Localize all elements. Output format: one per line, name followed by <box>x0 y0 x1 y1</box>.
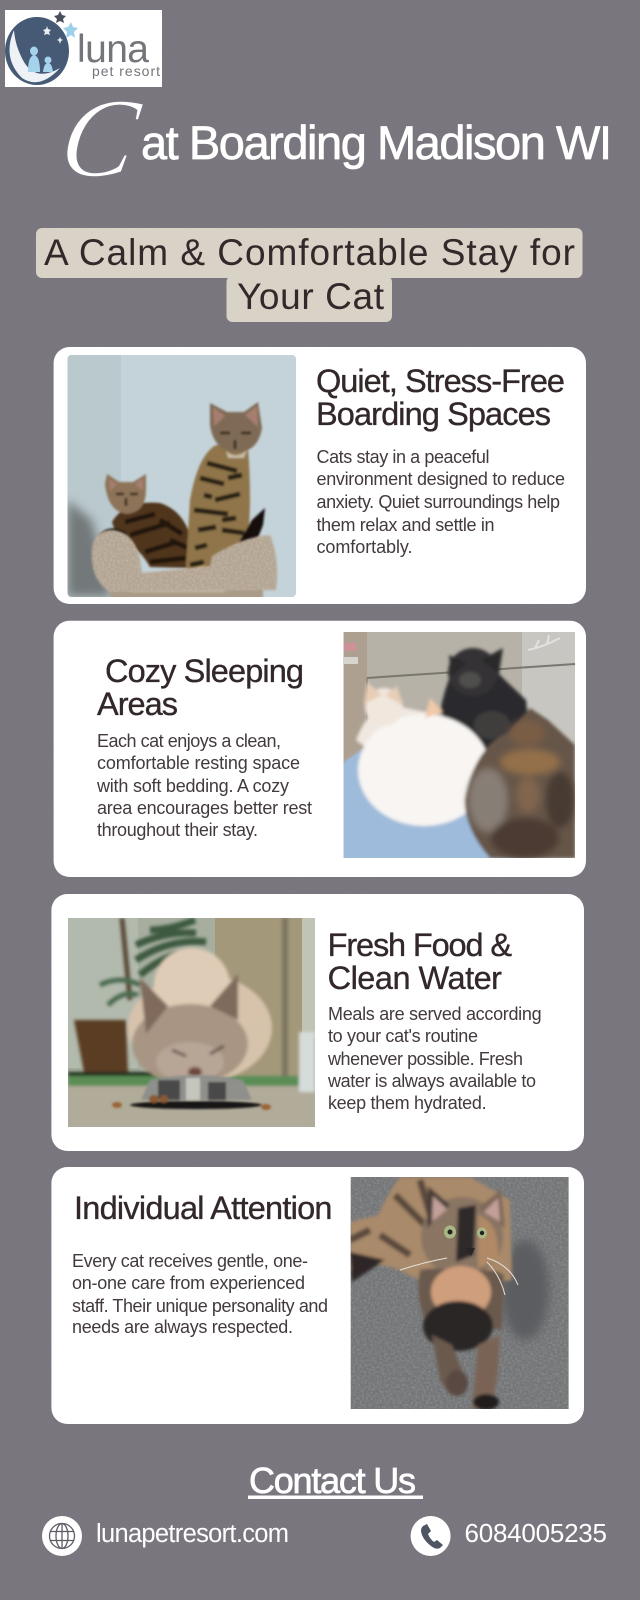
body text: Meals are served according <box>328 1004 542 1024</box>
title: C <box>52 76 149 201</box>
icon: phone <box>411 1516 451 1556</box>
icon: globe <box>42 1516 82 1556</box>
photo: two bengal cats on a carpeted perch <box>67 355 297 600</box>
heading <box>316 363 565 432</box>
contact: phone <box>411 1516 607 1556</box>
body text: with soft bedding. A cozy <box>96 776 289 796</box>
heading: Quiet, Stress-Free <box>316 363 565 399</box>
body text: on-one care from experienced <box>72 1273 305 1293</box>
heading: Areas <box>97 686 178 722</box>
body text: keep them hydrated. <box>328 1093 487 1113</box>
panel: fresh food <box>51 894 584 1151</box>
contact: website: lunapetresort.com <box>96 1520 289 1548</box>
contact: website <box>42 1516 289 1556</box>
body text: comfortable resting space <box>97 753 300 773</box>
photo: four kittens huddled on a blue towel <box>343 632 575 858</box>
body text: staff. Their unique personality and <box>72 1296 328 1316</box>
tortoiseshell fur patches <box>468 720 574 858</box>
heading: Cozy Sleeping <box>105 653 304 689</box>
body text: them relax and settle in <box>316 515 494 535</box>
panel: individual attention <box>51 1167 584 1424</box>
subtitle highlight: A Calm & Comfortable Stay for <box>44 232 575 273</box>
body text <box>316 447 565 557</box>
logo: pet resort <box>92 63 160 79</box>
heading: Fresh Food & <box>328 927 512 963</box>
body text: anxiety. Quiet surroundings help <box>316 492 560 512</box>
body text: area encourages better rest <box>97 798 312 818</box>
body text: throughout their stay. <box>97 820 258 840</box>
subtitle highlight: Your Cat <box>237 276 385 317</box>
logo: luna <box>77 28 149 71</box>
body text: needs are always respected. <box>72 1317 293 1337</box>
photo: tortoiseshell cat on grey carpet <box>350 1177 570 1410</box>
title: at Boarding Madison WI <box>141 116 612 169</box>
heading: Boarding Spaces <box>316 396 551 432</box>
panel: quiet spaces <box>54 347 586 604</box>
contact heading: Contact Us <box>249 1460 416 1501</box>
logo <box>5 10 162 87</box>
panel: cozy sleeping <box>54 621 586 877</box>
body text: water is always available to <box>327 1071 536 1091</box>
heading: Clean Water <box>328 960 502 996</box>
body text: environment designed to reduce <box>316 469 565 489</box>
carpet bed <box>88 528 283 596</box>
heading: Individual Attention <box>74 1190 332 1226</box>
body text: comfortably. <box>316 537 412 557</box>
body text: Cats stay in a peaceful <box>316 447 490 467</box>
heading <box>97 653 304 722</box>
heading <box>328 927 512 996</box>
body text <box>327 1004 542 1113</box>
body text: Each cat enjoys a clean, <box>97 731 281 751</box>
contact: phone: 6084005235 <box>464 1518 607 1548</box>
body text: whenever possible. Fresh <box>327 1049 523 1069</box>
title <box>52 76 612 201</box>
subtitle highlight <box>36 228 582 322</box>
body text: to your cat's routine <box>328 1026 478 1046</box>
body text: Every cat receives gentle, one- <box>72 1251 308 1271</box>
body text <box>96 731 312 840</box>
body text <box>72 1251 328 1337</box>
photo: cat eating from a steel bowl <box>68 918 315 1127</box>
